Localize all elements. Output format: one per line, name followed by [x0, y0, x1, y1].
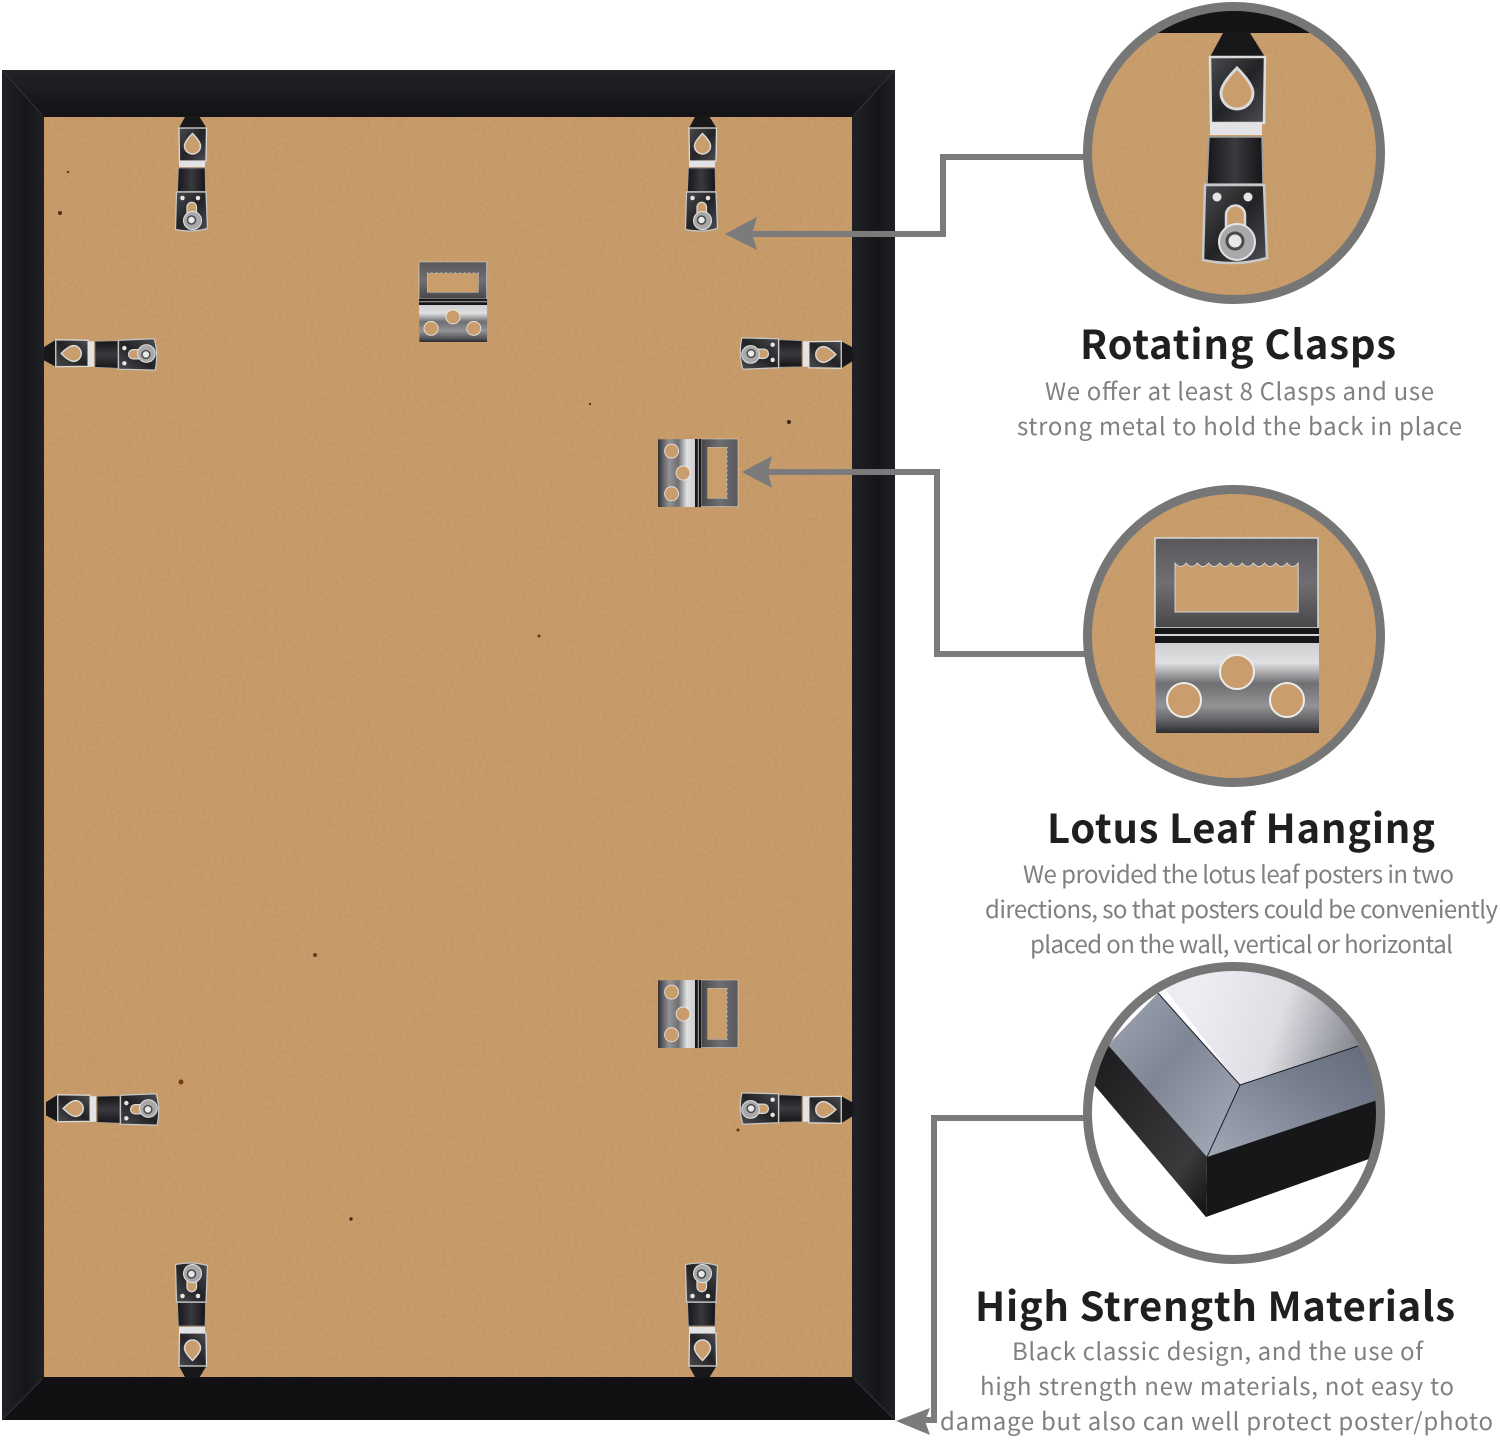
circle: rotating clasp detail: [1080, 0, 1390, 310]
circle: lotus leaf hanger detail: [1080, 485, 1390, 795]
sawtooth hangers on frame: [419, 262, 738, 1048]
black frame: [2, 70, 895, 1420]
text: materials description: Black classic design, and the use of: [1012, 1332, 1424, 1367]
text: clasps description: strong metal to hold the back in place: [1017, 407, 1462, 442]
cardboard backing: [44, 117, 852, 1377]
text: hanging description: placed on the wall, vertical or horizontal: [1030, 925, 1453, 960]
circle: frame corner detail: [1088, 960, 1380, 1260]
heading: Lotus Leaf Hanging: Lotus Leaf Hanging: [1047, 797, 1435, 855]
text: hanging description: [985, 855, 1498, 960]
heading: High Strength Materials: High Strength Materials: [975, 1275, 1455, 1333]
text: materials description: high strength new materials, not easy to: [980, 1367, 1454, 1402]
text: hanging description: We provided the lotus leaf posters in two: [1023, 855, 1454, 890]
poster frame back: [2, 70, 895, 1420]
arrow: hanger callout: [742, 456, 1085, 654]
text: clasps description: We offer at least 8 Clasps and use: [1045, 372, 1434, 407]
text: clasps description: [1017, 372, 1462, 442]
text: materials description: [940, 1332, 1493, 1437]
arrow: clasp callout: [725, 157, 1085, 250]
text: hanging description: directions, so that posters could be conveniently: [985, 890, 1498, 925]
heading: Rotating Clasps: Rotating Clasps: [1080, 313, 1396, 371]
arrow: materials callout: [896, 1118, 1085, 1435]
rotating clasps on frame: [44, 116, 853, 1378]
text: materials description: damage but also can well protect poster/photo: [940, 1402, 1493, 1437]
